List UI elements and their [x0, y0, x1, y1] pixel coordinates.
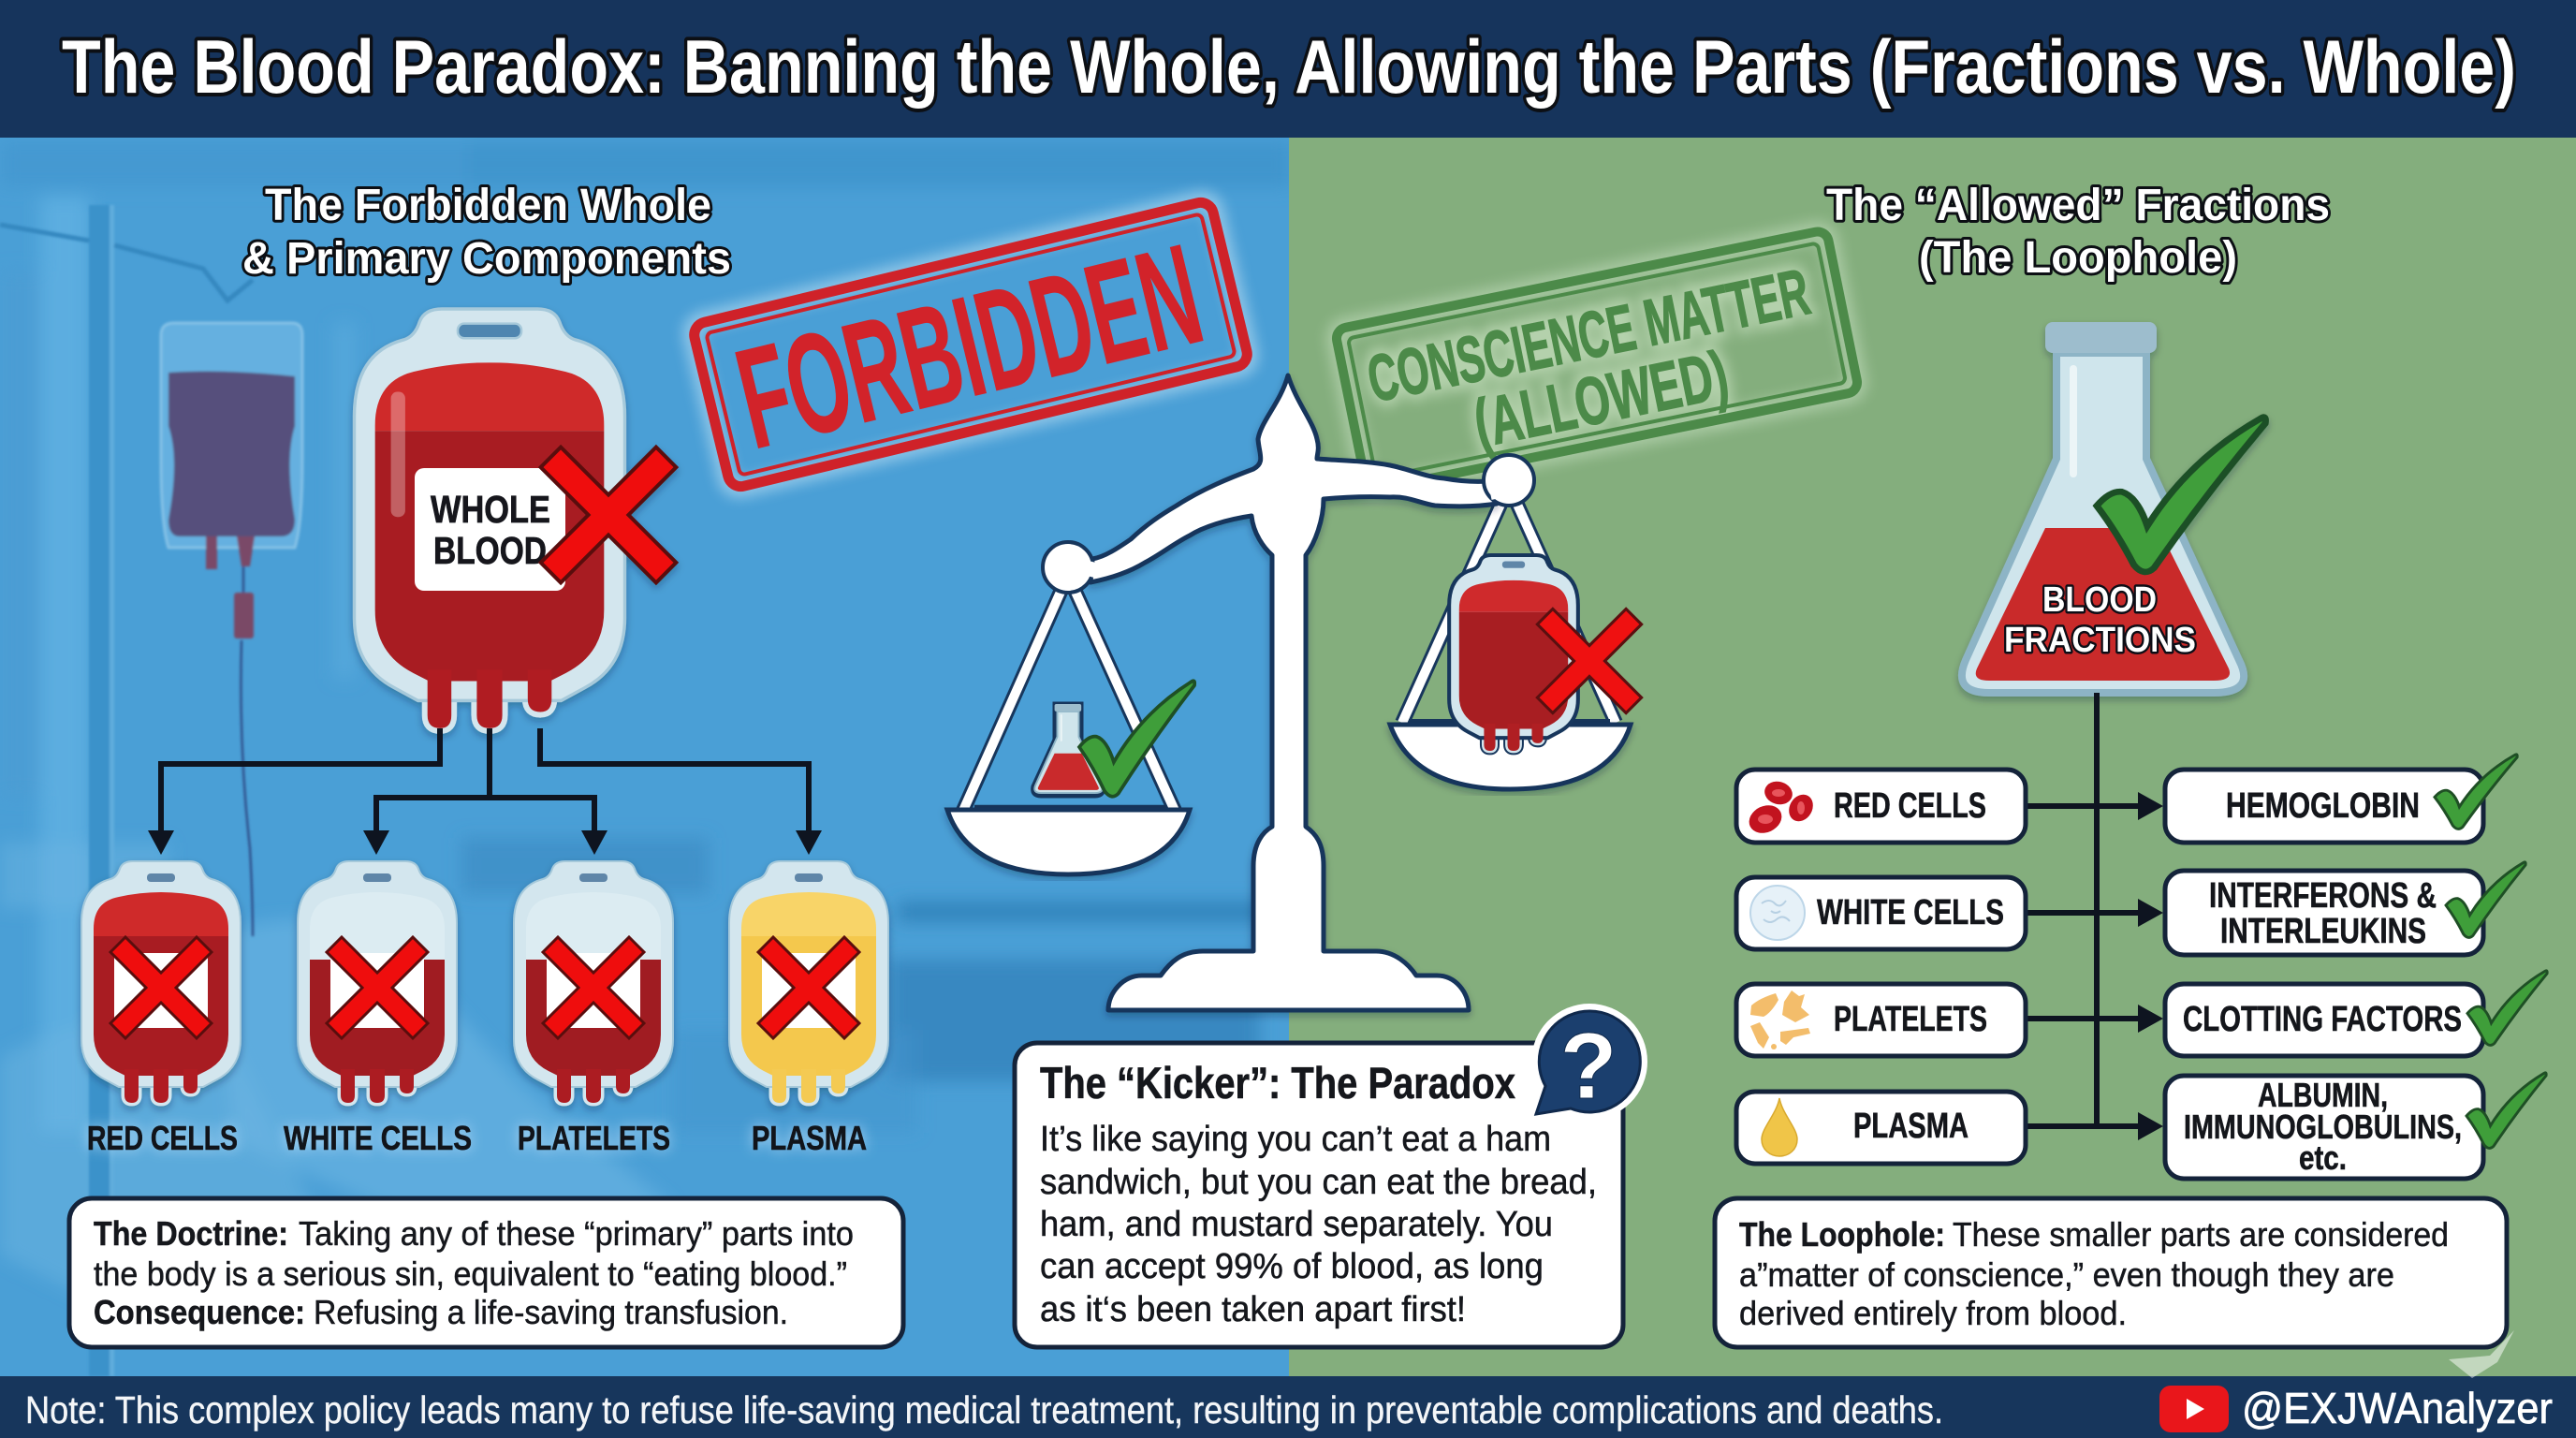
arrows to components [148, 728, 822, 855]
fraction: albumin: IMMUNOGLOBULINS, [2184, 1108, 2462, 1146]
left heading: & Primary Components [242, 234, 731, 284]
fraction: hemoglobin [2165, 755, 2517, 843]
source: white cells: WHITE CELLS [1817, 893, 2004, 932]
stamp: forbidden: FORBIDDEN [724, 214, 1216, 479]
component labels: WHITE CELLS [284, 1119, 472, 1157]
kicker text box [1015, 1004, 1647, 1347]
label: whole blood: BLOOD [433, 529, 547, 572]
icon: question bubble: ? [1559, 1014, 1617, 1119]
right heading [1826, 181, 2330, 283]
loophole text box: These smaller parts are considered [1953, 1215, 2449, 1254]
bag: platelets [514, 861, 673, 1103]
connector lines [2026, 693, 2163, 1140]
doctrine text box: Taking any of these “primary” parts into [299, 1214, 854, 1253]
component labels: PLATELETS [518, 1119, 670, 1157]
component labels: RED CELLS [87, 1119, 238, 1157]
doctrine text box: Refusing a life-saving transfusion. [314, 1293, 788, 1331]
icon: white cell [1750, 886, 1805, 940]
label: whole blood: WHOLE [431, 488, 550, 531]
icon: platelets [1750, 990, 1810, 1049]
left heading [242, 181, 731, 284]
flask: blood fractions: FRACTIONS [2004, 621, 2196, 660]
kicker text box: sandwich, but you can eat the bread, [1040, 1163, 1597, 1202]
icon: check [1079, 681, 1194, 797]
channel handle: @EXJWAnalyzer [2242, 1384, 2553, 1432]
stamp: conscience matter: (ALLOWED) [1468, 337, 1734, 462]
component labels: PLASMA [752, 1119, 867, 1157]
doctrine text box: The Doctrine: [94, 1214, 288, 1253]
label: whole blood [415, 468, 565, 591]
footer bar [0, 1376, 2576, 1438]
icon: check [2446, 862, 2525, 937]
loophole text box: The Loophole: [1739, 1215, 1945, 1254]
component labels [87, 1119, 867, 1157]
fraction: interferons: INTERLEUKINS [2220, 912, 2426, 951]
whole blood bag [354, 309, 676, 728]
kicker text box: as it‘s been taken apart first! [1040, 1290, 1466, 1329]
component labels: WHITE CELLS [284, 1119, 472, 1157]
icon: question bubble [1531, 1004, 1647, 1120]
scale body [1090, 375, 1497, 1010]
kicker text box: The “Kicker”: The Paradox [1040, 1058, 1515, 1108]
kicker text box: It’s like saying you can’t eat a ham [1040, 1120, 1551, 1159]
left pan with flask [947, 590, 1194, 874]
icon: check [2467, 971, 2547, 1045]
fraction: hemoglobin: HEMOGLOBIN [2226, 786, 2420, 826]
loophole text box [1715, 1198, 2507, 1347]
stamp: conscience matter: (ALLOWED) [1468, 337, 1734, 462]
icon: youtube [2159, 1386, 2229, 1432]
fraction: clotting factors: CLOTTING FACTORS [2183, 1000, 2462, 1039]
doctrine text box: the body is a serious sin, equivalent to “eating blood.” [94, 1255, 847, 1293]
watermark [2449, 1330, 2514, 1378]
stamp: conscience matter: CONSCIENCE MATTER [1362, 255, 1815, 416]
source: plasma [1736, 1092, 2026, 1164]
background: blue left panel [0, 137, 1289, 1376]
fraction: albumin [2165, 1073, 2546, 1179]
right pan with bag [1390, 496, 1642, 789]
icon: X [1537, 609, 1642, 713]
left heading: The Forbidden Whole [265, 181, 711, 230]
stamp: conscience matter: CONSCIENCE MATTER [1362, 255, 1815, 416]
doctrine text box: Consequence: [94, 1293, 305, 1331]
fraction: interferons [2165, 862, 2525, 955]
fraction: interferons: INTERFERONS & [2209, 876, 2437, 916]
icon: plasma drop [1762, 1098, 1797, 1156]
bag: white cells [298, 861, 457, 1103]
icon: check [2435, 755, 2517, 829]
icon: red cells [1745, 779, 1818, 838]
icon: check [2097, 418, 2265, 572]
loophole text box: derived entirely from blood. [1739, 1294, 2127, 1332]
background: green right panel [1289, 137, 2576, 1376]
fraction: clotting factors [2165, 971, 2547, 1056]
blurred hospital scene [0, 140, 1292, 1376]
bag on pan [1449, 555, 1578, 751]
stamp: conscience matter [1335, 229, 1859, 492]
flask: blood fractions: BLOOD [2042, 580, 2157, 620]
IV bag [161, 323, 302, 936]
fraction: albumin: ALBUMIN, [2258, 1076, 2388, 1114]
source: platelets [1736, 984, 2026, 1056]
doctrine text box [69, 1198, 903, 1347]
fraction: albumin: etc. [2299, 1138, 2347, 1177]
icon: X [541, 448, 676, 582]
stamp: forbidden [689, 198, 1252, 492]
flask: blood fractions [1962, 322, 2265, 693]
source: red cells: RED CELLS [1834, 786, 1986, 826]
balance scale [947, 375, 1642, 1010]
source: plasma: PLASMA [1853, 1107, 1969, 1146]
bag: plasma [729, 861, 888, 1103]
footer note: Note: This complex policy leads many to refuse life-saving medical treatment, resulting in preventable complications and deaths. [25, 1388, 1943, 1431]
right heading: The “Allowed” Fractions [1826, 181, 2330, 230]
component labels: PLATELETS [518, 1119, 670, 1157]
component labels: RED CELLS [87, 1119, 238, 1157]
source: red cells [1736, 770, 2026, 843]
IV pole [0, 205, 302, 1376]
right heading: (The Loophole) [1919, 233, 2237, 283]
title banner [0, 0, 2576, 138]
loophole text box: a”matter of conscience,” even though they are [1739, 1255, 2394, 1294]
kicker text box: can accept 99% of blood, as long [1040, 1247, 1544, 1286]
bag: red cells [81, 861, 241, 1103]
kicker text box: ham, and mustard separately. You [1040, 1205, 1553, 1244]
component labels: PLASMA [752, 1119, 867, 1157]
source: platelets: PLATELETS [1834, 1000, 1987, 1039]
source: white cells [1736, 877, 2026, 949]
flask on pan [1033, 704, 1103, 796]
icon: check [2466, 1073, 2546, 1148]
